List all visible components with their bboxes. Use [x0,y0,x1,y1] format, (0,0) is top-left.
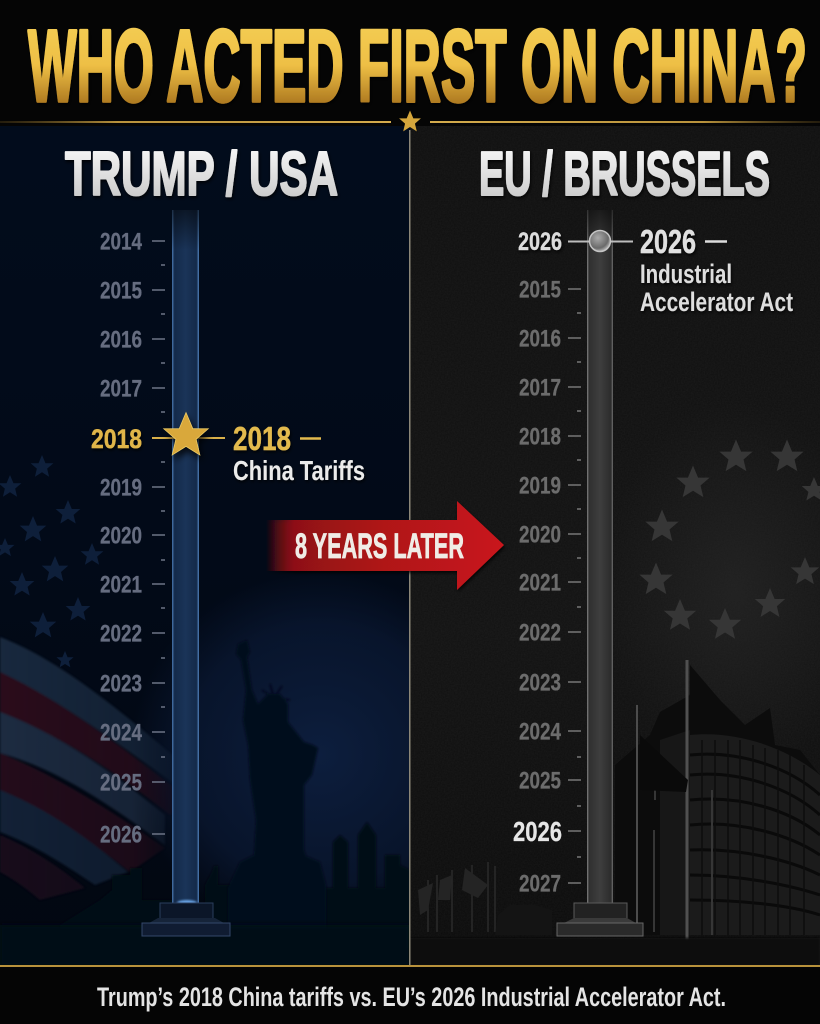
year scale: EU: 2026 [513,816,562,847]
year scale: EU: 2018 [519,424,561,450]
year scale: USA: 2021 [100,572,142,598]
year scale: USA: 2026 [100,822,142,848]
year scale: USA: 2024 [100,720,143,746]
year scale: EU: 2024 [519,718,562,746]
timeline tube [172,210,199,906]
icon: flag stars [0,455,103,667]
panel: Trump / USA [0,126,410,965]
year scale: EU: 2017 [519,374,561,402]
year scale: USA: 2019 [100,474,142,502]
milestone: 2026 Industrial Accelerator Act: 2026 [640,223,696,260]
column base [557,903,643,936]
milestone: 2018 China Tariffs: 2018 [91,424,142,454]
sky glow [130,570,510,940]
year scale: EU: 2020 [519,522,561,548]
icon: metal knob [590,230,610,252]
year scale: USA: 2016 [100,326,142,354]
column top fade [587,210,613,250]
year scale: EU: 2021 [519,570,561,596]
year scale: USA: 2017 [100,376,142,402]
milestone: 2018 China Tariffs: 2018 [233,420,291,457]
milestone: 2026 Industrial Accelerator Act: Industrial [640,259,732,289]
heading: Trump / USA: TRUMP / USA [65,140,338,209]
arrow: 8 years later [266,501,504,590]
year scale: USA: 2022 [100,620,142,648]
tube base [142,903,230,936]
milestone: 2018 China Tariffs: China Tariffs [233,455,365,486]
icon: gold star [164,412,208,455]
icon: header star [399,110,421,131]
year scale: EU: 2019 [519,472,561,500]
year scale: USA: 2025 [100,770,142,796]
year scale: USA: 2020 [100,522,142,550]
year scale: EU [513,276,581,898]
year scale: USA [100,228,165,848]
year scale: EU: 2016 [519,326,561,352]
header rule with star [0,110,820,131]
year scale: EU: 2015 [519,276,561,304]
year scale: EU: 2023 [519,670,561,696]
arrow: 8 years later: 8 YEARS LATER [295,527,464,566]
year scale: USA: 2015 [100,278,142,304]
footer [0,965,820,1024]
icon: statue of liberty [228,640,326,935]
milestone: 2026 Industrial Accelerator Act: 2026 [518,228,562,256]
year scale: EU: 2025 [519,768,561,794]
timeline column [587,210,613,903]
ground [0,925,410,966]
icon: american flag stripes [0,637,190,900]
milestone: 2026 Industrial Accelerator Act [518,223,793,317]
center divider [409,130,410,966]
milestone: 2018 China Tariffs [91,412,365,486]
icon: Berlaymont building [615,660,820,942]
year scale: USA: 2023 [100,670,142,698]
year scale: EU: 2027 [519,870,561,898]
icon: flags at left [418,862,552,935]
icon: EU stars [639,440,820,639]
ground [410,938,820,966]
year scale: EU: 2022 [519,620,561,646]
year scale: USA: 2014 [100,228,143,256]
panel: EU / Brussels [410,126,820,966]
skyline [60,822,410,948]
